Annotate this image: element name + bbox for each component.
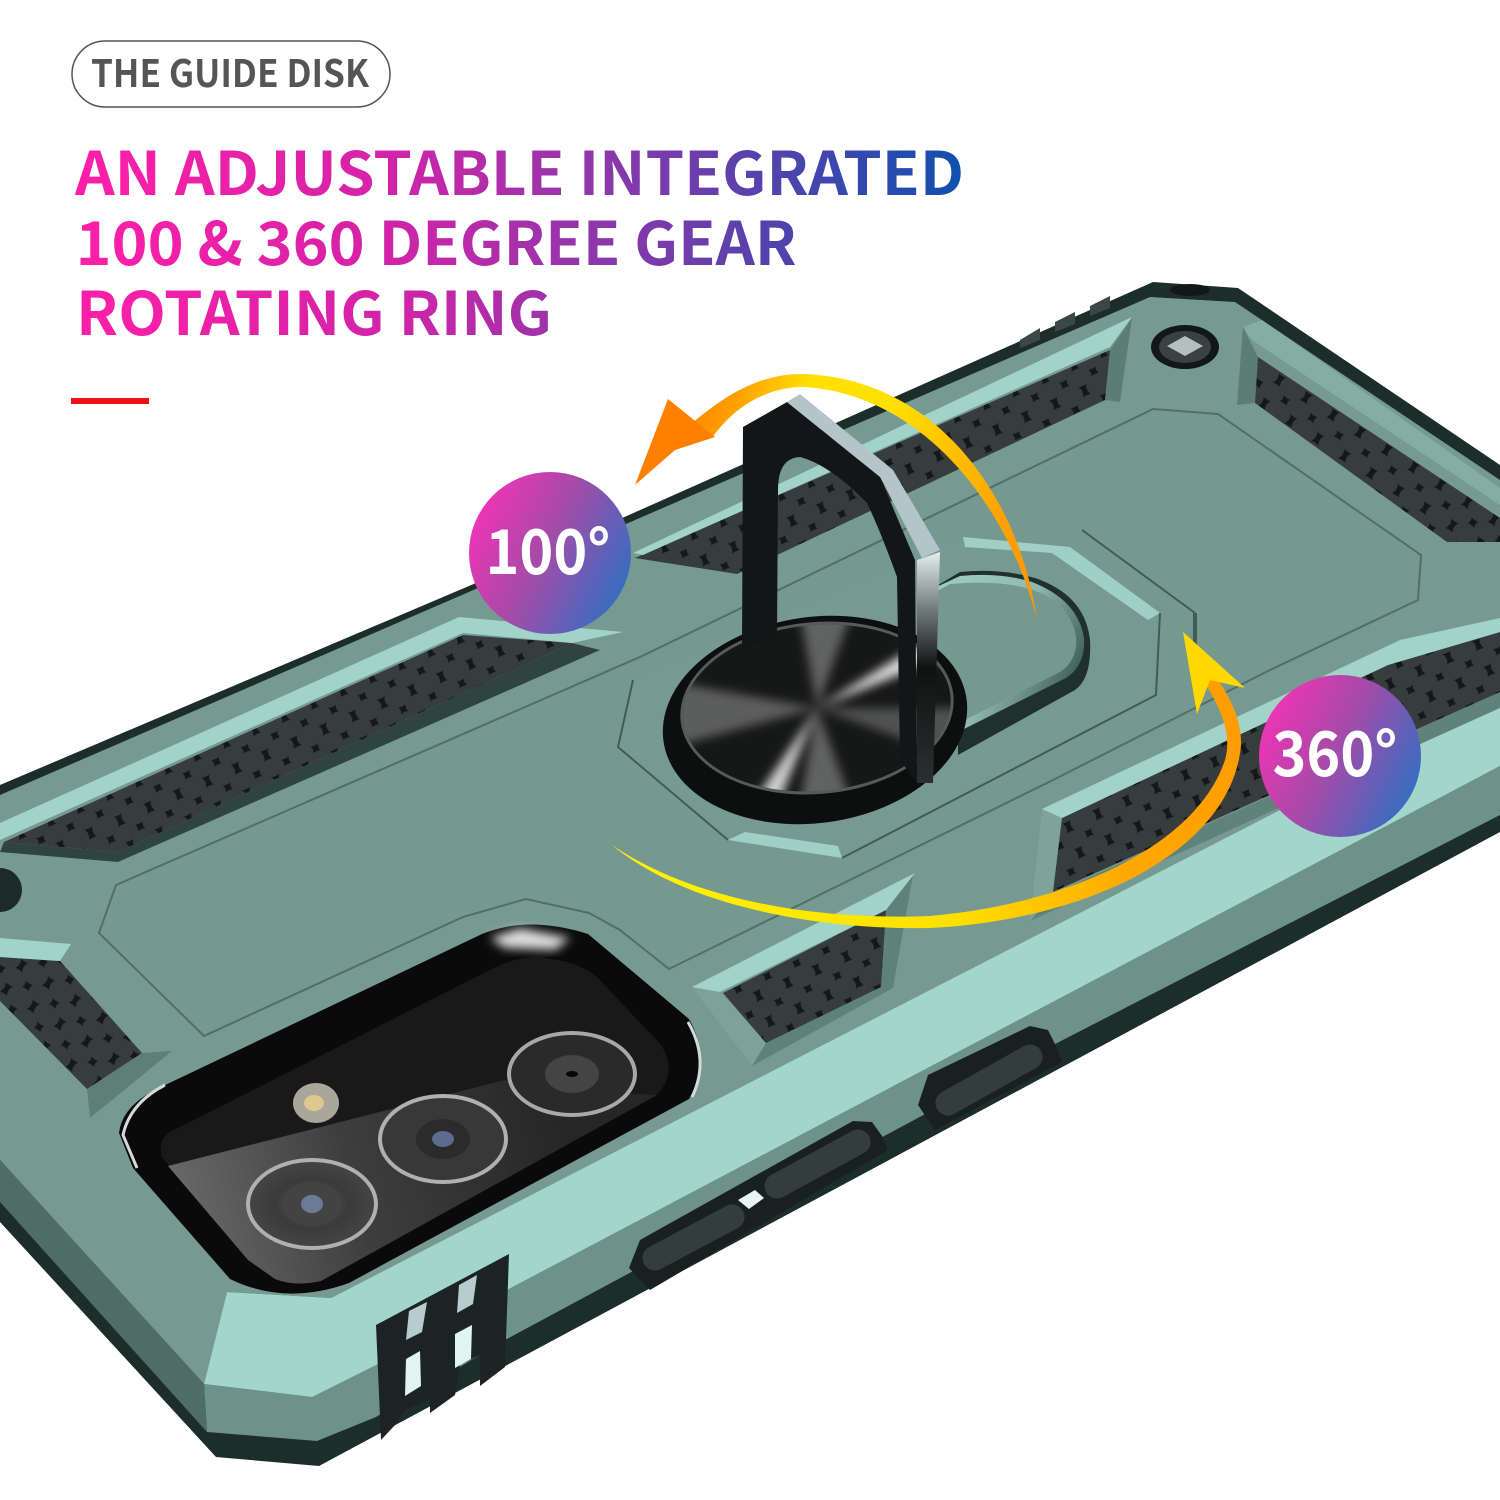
mount lines: [618, 530, 1195, 858]
title: 100 & 360 DEGREE GEAR: [76, 196, 796, 283]
grip right side bevels: [1030, 692, 1500, 921]
edge screw: [1170, 284, 1210, 296]
button gap: [738, 1190, 764, 1209]
flash: [293, 1083, 339, 1123]
ring silver side: [917, 552, 940, 783]
case outer shell: [0, 282, 1500, 1466]
lower button recess: [629, 1121, 888, 1290]
badge: 100 degrees: [469, 472, 631, 634]
inner panel outline: [99, 409, 1421, 1036]
ring stand: [662, 394, 968, 824]
grip right: [1053, 632, 1500, 892]
glass reflection: [168, 1080, 657, 1284]
arrow 360: [612, 632, 1245, 928]
arrow 100: [635, 374, 1037, 620]
badge: 360 degrees: 360°: [1272, 704, 1398, 794]
ring mount plate: [618, 537, 1160, 858]
grip top centre bevel: [1105, 318, 1132, 402]
corner left face: [0, 1160, 207, 1432]
red divider: [71, 398, 149, 404]
disk base: [649, 597, 981, 843]
edge slots: [1020, 296, 1110, 348]
grip strips: [0, 318, 1500, 1118]
lens 2: [378, 1094, 508, 1184]
upper button recess: [918, 1026, 1062, 1130]
grip lower centre: [723, 910, 886, 1043]
lens 1: [246, 1158, 378, 1250]
ring loop: [742, 402, 917, 783]
title: ROTATING RING: [76, 266, 552, 353]
case back plate: [0, 297, 1500, 1384]
grip top centre: [635, 350, 1110, 574]
grip left shadow: [0, 643, 600, 862]
lens 3: [507, 1031, 637, 1117]
grip lower left bevel: [87, 1051, 172, 1118]
light bevels: [0, 317, 1500, 992]
light side edge: [204, 697, 1500, 1397]
grip left: [4, 635, 572, 852]
badge: 100 degrees: 100°: [486, 502, 610, 592]
frame highlights: [123, 1022, 700, 1168]
top screw: [1151, 325, 1219, 369]
camera black frame: [119, 924, 700, 1294]
badge: 360 degrees: [1259, 675, 1421, 837]
frame top highlight: [490, 928, 570, 950]
grip lower left: [0, 957, 142, 1089]
title: AN ADJUSTABLE INTEGRATED: [74, 126, 964, 213]
tag: the guide disk: THE GUIDE DISK: [91, 43, 370, 98]
title: [74, 126, 964, 353]
camera module: [119, 924, 700, 1294]
mount bevels: [728, 537, 1160, 858]
camera glass: [161, 957, 669, 1284]
grip top right bevel: [1237, 327, 1258, 405]
top right edge band: [1243, 320, 1500, 505]
disk rim: [673, 610, 961, 806]
ring slot: [930, 571, 1090, 755]
speaker bumper: [376, 1254, 509, 1440]
edge screw left: [0, 868, 22, 912]
ring silver top: [787, 394, 940, 558]
button bodies: [655, 1057, 1030, 1258]
phone case: [0, 282, 1500, 1466]
grip lower centre bevels: [692, 875, 913, 1066]
disk face: [688, 624, 951, 792]
grip top right: [1255, 357, 1500, 542]
lower side band: [204, 766, 1500, 1441]
side buttons: [629, 1026, 1062, 1290]
